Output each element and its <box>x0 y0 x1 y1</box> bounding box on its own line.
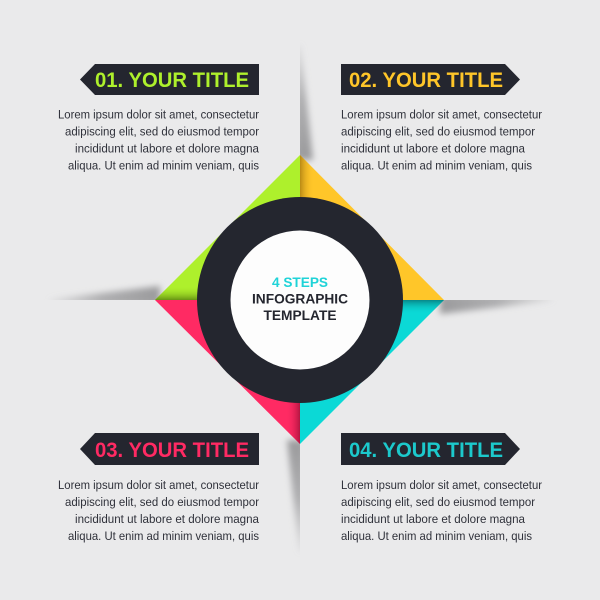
label: template: TEMPLATE <box>264 308 336 323</box>
body text 04: incididunt ut labore et dolore magna <box>341 512 525 526</box>
fold shadow: bottom <box>287 440 305 552</box>
segment shading: cyan <box>300 300 444 314</box>
segment: yellow <box>300 155 444 300</box>
centre text <box>252 275 348 323</box>
body text 02 <box>341 108 542 172</box>
label: 4 steps: 4 STEPS <box>272 275 328 290</box>
label: infographic: INFOGRAPHIC <box>252 292 348 306</box>
body text 03: Lorem ipsum dolor sit amet, consectetur <box>58 478 259 492</box>
segment shading: pink <box>286 300 300 444</box>
body text 02: adipiscing elit, sed do eiusmod tempor <box>341 124 535 138</box>
panel: step 02 <box>341 64 542 172</box>
dark ring <box>197 197 403 403</box>
body text 04: aliqua. Ut enim ad minim veniam, quis <box>341 529 532 543</box>
panel: step 01 <box>58 64 259 172</box>
segment shading: green <box>155 286 300 300</box>
body text 01: adipiscing elit, sed do eiusmod tempor <box>65 124 259 138</box>
segment: cyan <box>300 300 444 444</box>
body text 04: Lorem ipsum dolor sit amet, consectetur <box>341 478 542 492</box>
white centre circle <box>230 230 370 370</box>
banner 02 <box>341 64 520 95</box>
panel: step 03 <box>58 433 259 543</box>
title 04: 04. YOUR TITLE <box>349 439 503 462</box>
body text 01: incididunt ut labore et dolore magna <box>75 142 259 156</box>
body text 02: aliqua. Ut enim ad minim veniam, quis <box>341 158 532 172</box>
title 01: 01. YOUR TITLE <box>95 69 249 92</box>
body text 01 <box>58 108 259 172</box>
body text 03 <box>58 478 259 543</box>
segment: pink <box>155 300 300 444</box>
panel: step 04 <box>341 433 542 543</box>
body text 01: Lorem ipsum dolor sit amet, consectetur <box>58 108 259 122</box>
title 03: 03. YOUR TITLE <box>95 439 249 462</box>
body text 04 <box>341 478 542 543</box>
body text 01: aliqua. Ut enim ad minim veniam, quis <box>68 158 259 172</box>
fold shadow: left <box>56 283 164 300</box>
body text 02: Lorem ipsum dolor sit amet, consectetur <box>341 108 542 122</box>
body text 04: adipiscing elit, sed do eiusmod tempor <box>341 495 535 509</box>
body text 03: incididunt ut labore et dolore magna <box>75 512 259 526</box>
title 02: 02. YOUR TITLE <box>349 69 503 92</box>
fold shadow: right <box>436 300 546 317</box>
segment: green <box>155 155 300 300</box>
body text 03: aliqua. Ut enim ad minim veniam, quis <box>68 529 259 543</box>
body text 03: adipiscing elit, sed do eiusmod tempor <box>65 495 259 509</box>
segment shading: yellow <box>300 155 314 300</box>
body text 02: incididunt ut labore et dolore magna <box>341 142 525 156</box>
banner 03 <box>80 433 259 465</box>
diamond segments <box>155 155 444 444</box>
banner 01 <box>80 64 259 95</box>
banner 04 <box>341 433 520 465</box>
fold shadow: top <box>300 51 316 164</box>
